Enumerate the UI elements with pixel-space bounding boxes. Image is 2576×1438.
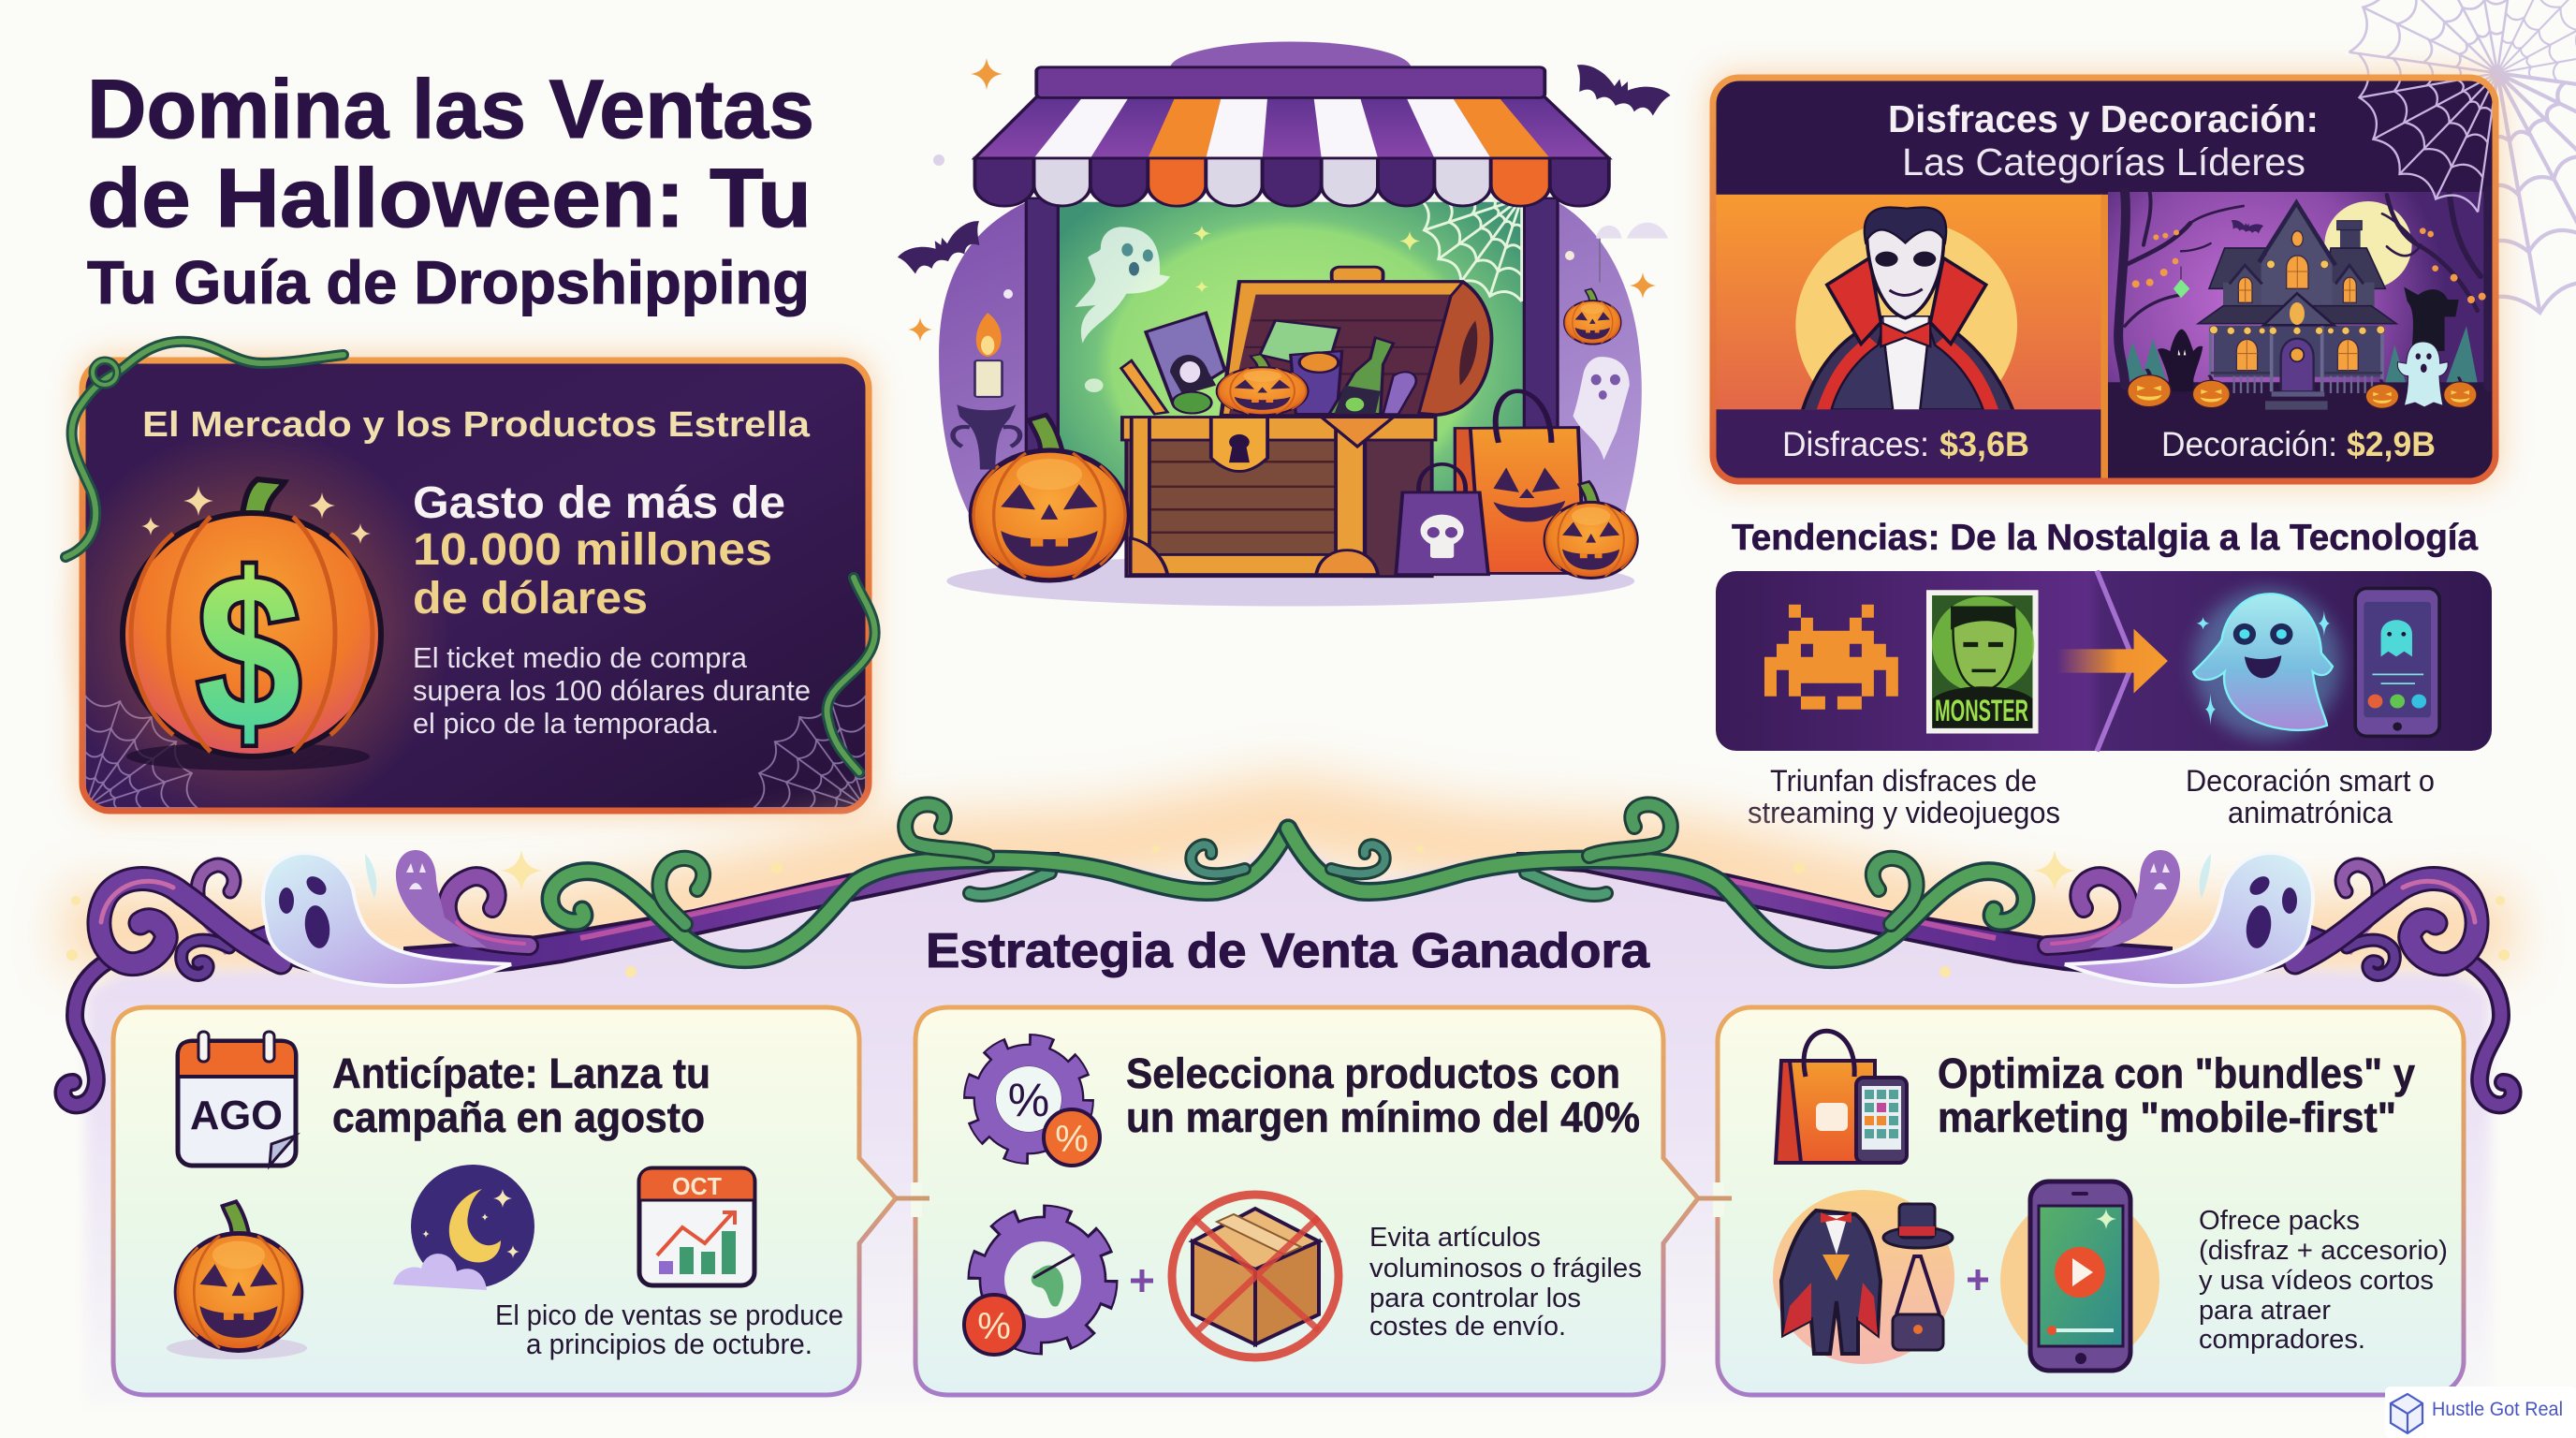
card heading bbox=[1126, 1049, 1640, 1141]
card heading: Selecciona productos con bbox=[1126, 1049, 1620, 1097]
background blob bbox=[939, 41, 1642, 607]
icon: gauge gear bbox=[964, 1214, 1108, 1355]
card note: costes de envío. bbox=[1369, 1312, 1566, 1342]
key figure: 10.000 millones bbox=[413, 525, 772, 575]
plus sign bbox=[1968, 1269, 1988, 1290]
main title: Domina las Ventas bbox=[87, 62, 814, 155]
icon: pumpkin bbox=[167, 1201, 307, 1359]
icon: monster poster art bbox=[1926, 590, 2039, 734]
card 3: bundles and mobile-first bbox=[1698, 1007, 2464, 1395]
trend caption left: streaming y videojuegos bbox=[1748, 796, 2060, 829]
icon: costume set bbox=[1773, 1190, 1954, 1364]
card note: Ofrece packs bbox=[2199, 1206, 2360, 1236]
chevron divider bbox=[2097, 571, 2134, 751]
card heading bbox=[332, 1049, 710, 1141]
ornamental vine: right half bbox=[1288, 804, 2513, 1105]
card 2: margin selection bbox=[896, 1007, 1698, 1395]
trend caption left bbox=[1748, 764, 2060, 829]
key figure: de dólares bbox=[413, 574, 648, 624]
card note bbox=[1369, 1223, 1642, 1342]
arrow bbox=[2057, 629, 2168, 693]
costume label: $3,6B bbox=[1939, 425, 2029, 463]
card heading: Anticípate: Lanza tu bbox=[332, 1049, 710, 1097]
shop window bbox=[1026, 198, 1558, 519]
card note bbox=[2199, 1206, 2448, 1355]
spider web: top right corner bbox=[2339, 0, 2576, 348]
panel: costumes and decoration categories bbox=[1708, 53, 2501, 486]
supporting text: El ticket medio de compra bbox=[413, 641, 748, 674]
card note: Evita artículos bbox=[1369, 1223, 1541, 1253]
awning bbox=[974, 67, 1609, 206]
panel corner webs bbox=[85, 696, 866, 808]
strategy section background bbox=[66, 814, 2510, 1404]
poster title: MONSTER bbox=[1935, 694, 2028, 727]
icon: october sales calendar: OCT bbox=[672, 1172, 722, 1200]
chest base bbox=[1122, 418, 1435, 577]
icon: moon at night bbox=[393, 1165, 534, 1290]
costume label: Disfraces: bbox=[1782, 425, 1929, 463]
card heading: campaña en agosto bbox=[332, 1093, 705, 1141]
main title bbox=[87, 62, 814, 316]
icon: august calendar bbox=[178, 1032, 296, 1166]
card heading bbox=[1938, 1049, 2415, 1141]
web over panel bbox=[2357, 81, 2492, 213]
icon: percent gear bbox=[972, 1042, 1100, 1166]
shopping bags bbox=[1396, 391, 1637, 578]
card note: para controlar los bbox=[1369, 1284, 1581, 1313]
key figure bbox=[413, 478, 785, 624]
central illustration: halloween shop with treasure chest bbox=[939, 41, 1668, 607]
decoration label bbox=[2161, 425, 2436, 463]
main title: de Halloween: Tu bbox=[87, 151, 812, 244]
card heading: un margen mínimo del 40% bbox=[1126, 1093, 1640, 1141]
icon: pumpkin with dollar sign: $ bbox=[197, 530, 301, 775]
decoration label: $2,9B bbox=[2347, 425, 2436, 463]
trend caption right: animatrónica bbox=[2228, 796, 2393, 829]
card note: y usa vídeos cortos bbox=[2199, 1266, 2434, 1296]
panel subheading: Las Categorías Líderes bbox=[1902, 140, 2305, 183]
icon: friendly ghost glow bbox=[2193, 589, 2341, 739]
card 1: anticipate bbox=[113, 1007, 896, 1395]
card note: (disfraz + accesorio) bbox=[2199, 1236, 2448, 1266]
trend caption right bbox=[2186, 764, 2435, 829]
icon: gauge gear: % bbox=[977, 1306, 1011, 1347]
key figure: Gasto de más de bbox=[413, 478, 785, 528]
trends heading: Tendencias: De la Nostalgia a la Tecnología bbox=[1732, 518, 2478, 558]
card note: para atraer bbox=[2199, 1296, 2331, 1326]
panel: trends band bbox=[1716, 571, 2492, 751]
panel heading: El Mercado y los Productos Estrella bbox=[142, 405, 811, 445]
supporting text bbox=[413, 641, 811, 740]
large jack-o-lantern bbox=[972, 415, 1127, 580]
trend caption right: Decoración smart o bbox=[2186, 764, 2435, 798]
supporting text: el pico de la temporada. bbox=[413, 707, 719, 740]
icon: august calendar: AGO bbox=[190, 1093, 283, 1138]
decoration label: Decoración: bbox=[2161, 425, 2337, 463]
card note: compradores. bbox=[2199, 1325, 2365, 1355]
panel heading: Disfraces y Decoración: bbox=[1888, 97, 2319, 140]
icon: phone with ghost app bbox=[2355, 589, 2439, 736]
plus sign bbox=[1131, 1269, 1153, 1292]
candle sconce bbox=[953, 313, 1020, 469]
bats and sparkles around the shop bbox=[897, 58, 1672, 342]
card heading: Optimiza con "bundles" y bbox=[1938, 1049, 2415, 1097]
card note: El pico de ventas se produce bbox=[495, 1299, 843, 1331]
costume tile: vampire bbox=[1710, 195, 2102, 479]
costume label bbox=[1782, 425, 2029, 463]
ornamental vine: left half bbox=[63, 804, 1288, 1105]
icon: october sales calendar bbox=[639, 1168, 754, 1285]
section heading: Estrategia de Venta Ganadora bbox=[926, 924, 1650, 978]
supporting text: supera los 100 dólares durante bbox=[413, 674, 811, 707]
watermark badge: Hustle Got Real bbox=[2432, 1399, 2563, 1420]
card note: voluminosos o frágiles bbox=[1369, 1254, 1642, 1284]
card note: a principios de octubre. bbox=[526, 1328, 812, 1360]
panel: market and star products bbox=[51, 342, 875, 829]
icon: phone playing video bbox=[2000, 1181, 2159, 1371]
icon: shopping bag and tablet bbox=[1776, 1031, 1907, 1163]
chest lid and contents bbox=[1121, 267, 1491, 416]
icon: pixel invader bbox=[1764, 605, 1898, 710]
trend caption left: Triunfan disfraces de bbox=[1770, 764, 2037, 798]
card note bbox=[495, 1299, 843, 1360]
right side decorations bbox=[1564, 223, 1668, 460]
icon: percent gear: % bbox=[1008, 1074, 1049, 1126]
icon: percent gear: % bbox=[1055, 1119, 1089, 1160]
icon: pumpkin with dollar sign bbox=[51, 426, 453, 829]
main title: Tu Guía de Dropshipping bbox=[87, 248, 810, 316]
green vines on panel bbox=[66, 342, 875, 772]
watermark badge bbox=[2385, 1387, 2576, 1438]
decoration tile: haunted house bbox=[2108, 192, 2501, 479]
card heading: marketing "mobile-first" bbox=[1938, 1093, 2396, 1141]
icon: prohibited cardboard box bbox=[1172, 1195, 1339, 1357]
